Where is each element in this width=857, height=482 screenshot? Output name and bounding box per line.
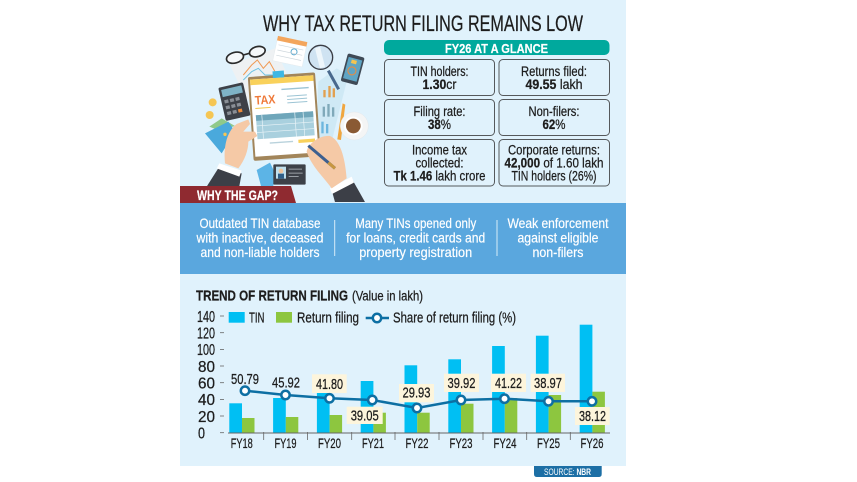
chart heading: (Value in lakh) bbox=[352, 288, 423, 304]
reason 2: property registration bbox=[359, 244, 472, 260]
illustration: tax desk bbox=[205, 36, 368, 203]
text: TAX: TAX bbox=[254, 92, 277, 108]
icon: coins bbox=[206, 98, 217, 119]
share values: 39.92 bbox=[448, 375, 476, 392]
reason 2 bbox=[346, 215, 485, 260]
source tag: SOURCE: NBR bbox=[544, 467, 591, 478]
legend: Return filing bbox=[297, 311, 359, 327]
reason 3 bbox=[508, 215, 609, 260]
y axis: 40 bbox=[198, 392, 215, 409]
card: filing rate: Filing rate: bbox=[414, 104, 466, 119]
card: income tax collected bbox=[384, 140, 494, 186]
y axis: 80 bbox=[198, 359, 215, 376]
card: returns filed bbox=[499, 60, 610, 96]
table on form bbox=[256, 111, 315, 139]
right hand and sleeve bbox=[307, 136, 365, 202]
card: non-filers: Non-filers: bbox=[528, 104, 580, 119]
x axis: FY22 bbox=[406, 435, 429, 451]
x axis: FY18 bbox=[231, 435, 253, 451]
card: corporate returns bbox=[499, 140, 610, 186]
icon: calendar bbox=[273, 36, 307, 67]
x axis: FY25 bbox=[537, 435, 560, 451]
x axis: FY26 bbox=[580, 435, 604, 451]
share values: 50.79 bbox=[231, 371, 259, 388]
y axis bbox=[197, 309, 224, 442]
panel: background bbox=[180, 0, 626, 466]
TIN bars bbox=[229, 325, 592, 433]
return filing bars bbox=[242, 392, 605, 433]
reason 2: Many TINs opened only bbox=[355, 215, 476, 231]
icon: wallet bbox=[205, 118, 235, 153]
card: income tax collected: collected: bbox=[416, 156, 464, 170]
chart: trend of return filing bbox=[197, 309, 610, 451]
glance header bbox=[384, 40, 610, 56]
icon: glasses bbox=[225, 45, 266, 65]
card: filing rate: 38% bbox=[428, 117, 451, 132]
share values: 41.80 bbox=[316, 376, 343, 393]
x axis: FY24 bbox=[494, 435, 517, 451]
card: income tax collected: Income tax bbox=[412, 142, 467, 158]
banner: why the gap: WHY THE GAP? bbox=[197, 188, 278, 203]
icon: pencil bbox=[337, 103, 345, 140]
reason 3: non-filers bbox=[532, 244, 584, 260]
reason 1: and non-liable holders bbox=[200, 244, 320, 260]
card: non-filers bbox=[499, 100, 610, 136]
y axis: 140 bbox=[197, 309, 215, 326]
card: income tax collected: Tk 1.46 lakh crore bbox=[394, 168, 486, 184]
x axis: FY19 bbox=[274, 435, 297, 451]
share values: 45.92 bbox=[272, 374, 300, 391]
y axis: 120 bbox=[197, 326, 215, 342]
reason 1: Outdated TIN database bbox=[200, 215, 321, 231]
card: TIN holders bbox=[384, 60, 494, 96]
icon: clipboard bbox=[248, 68, 321, 161]
y axis: 0 bbox=[198, 426, 205, 442]
icon: coffee cup bbox=[340, 112, 368, 140]
pen bbox=[308, 146, 335, 168]
x axis: FY23 bbox=[450, 435, 473, 451]
card: returns filed: 49.55 lakh bbox=[526, 77, 582, 92]
reason 3: against eligible bbox=[518, 230, 599, 246]
x axis: FY20 bbox=[318, 435, 341, 451]
share values: 39.05 bbox=[351, 408, 379, 425]
glance header: FY26 AT A GLANCE bbox=[445, 41, 548, 56]
card: filing rate bbox=[384, 100, 494, 136]
card: TIN holders: 1.30cr bbox=[422, 77, 457, 92]
y axis: 20 bbox=[198, 409, 215, 426]
card: TIN holders: TIN holders: bbox=[410, 64, 468, 79]
chart heading: TREND OF RETURN FILING bbox=[196, 288, 348, 304]
share line bbox=[241, 386, 596, 412]
reason 3: Weak enforcement bbox=[508, 215, 609, 231]
card: corporate returns: Corporate returns: bbox=[508, 142, 600, 158]
left hand and sleeve bbox=[207, 119, 257, 203]
panel: reasons bbox=[180, 203, 626, 274]
share values: 29.93 bbox=[402, 385, 430, 402]
reason 1: with inactive, deceased bbox=[196, 230, 324, 246]
icon: phone bbox=[341, 53, 365, 85]
reason 1 bbox=[196, 215, 324, 260]
x axis bbox=[228, 432, 610, 451]
panel: FY26 at a glance bbox=[384, 40, 610, 186]
legend: Share of return filing (%) bbox=[393, 311, 516, 327]
card: non-filers: 62% bbox=[542, 117, 566, 132]
x axis: FY21 bbox=[362, 435, 384, 451]
icon: magnifier bbox=[309, 45, 339, 89]
card: returns filed: Returns filed: bbox=[521, 64, 587, 79]
icon: id card bbox=[273, 164, 306, 185]
legend: TIN bbox=[249, 311, 264, 327]
reason 2: for loans, credit cards and bbox=[346, 230, 485, 246]
share values bbox=[231, 371, 606, 425]
y axis: 60 bbox=[198, 376, 215, 392]
y axis: 100 bbox=[197, 342, 215, 359]
card: corporate returns: TIN holders (26%) bbox=[512, 168, 596, 184]
card: corporate returns: 42,000 of 1.60 lakh bbox=[504, 156, 604, 170]
share values: 41.22 bbox=[495, 375, 522, 392]
legend bbox=[229, 311, 516, 327]
icon: report sheet bbox=[317, 68, 348, 142]
share values: 38.12 bbox=[579, 408, 606, 425]
share values: 38.97 bbox=[534, 375, 562, 392]
icon: calculator bbox=[218, 82, 251, 121]
title: WHY TAX RETURN FILING REMAINS LOW bbox=[263, 11, 583, 36]
icon: blue folder bbox=[257, 163, 277, 190]
value label boxes bbox=[312, 374, 610, 425]
